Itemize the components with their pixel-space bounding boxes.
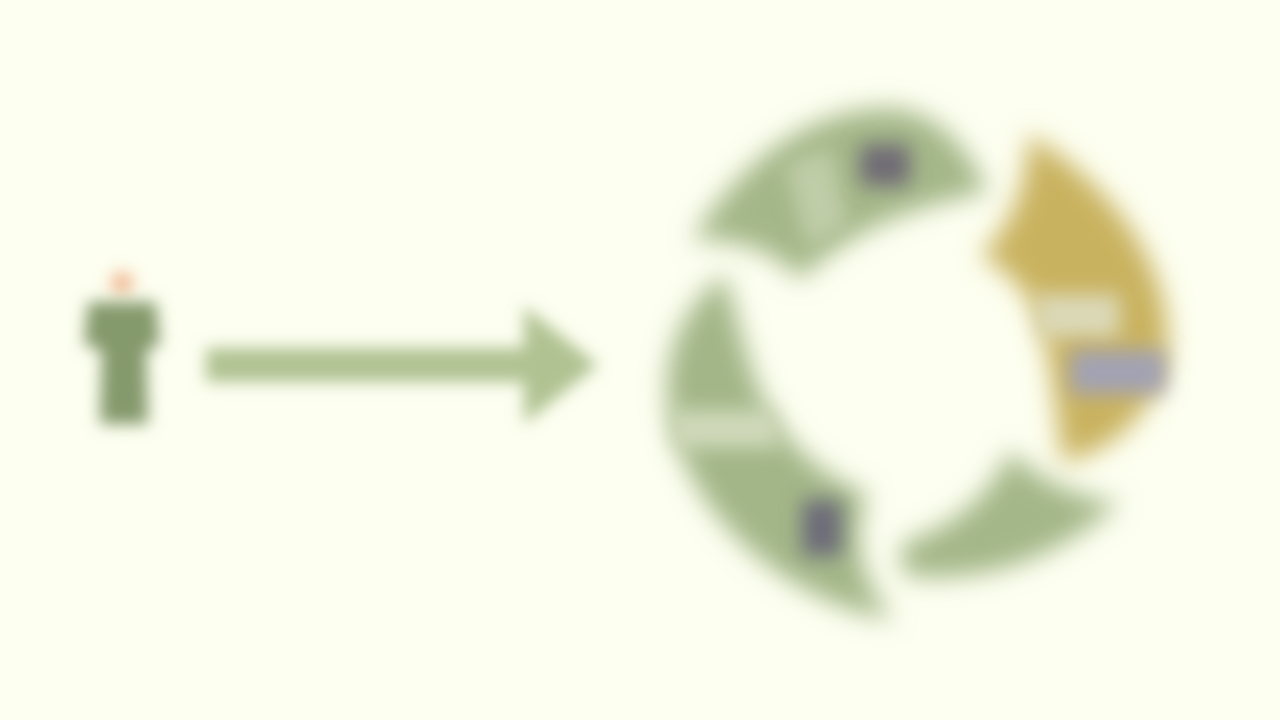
segment: right gold bbox=[980, 134, 1168, 462]
arrow bbox=[206, 306, 598, 424]
person head accent bbox=[111, 272, 133, 294]
segment: top bbox=[692, 108, 988, 280]
left segment light band bbox=[672, 410, 778, 448]
segment: left bbox=[667, 274, 894, 620]
segment: bottom right bbox=[901, 450, 1120, 577]
right segment light badge bbox=[1036, 294, 1120, 338]
top segment dark badge bbox=[860, 144, 910, 186]
person torso and legs bbox=[84, 302, 160, 424]
icon: person bbox=[84, 272, 160, 424]
right segment grey badge bbox=[1070, 350, 1166, 394]
top segment light band bbox=[785, 148, 848, 248]
ring diagram bbox=[667, 108, 1168, 620]
left segment dark badge bbox=[802, 500, 842, 556]
